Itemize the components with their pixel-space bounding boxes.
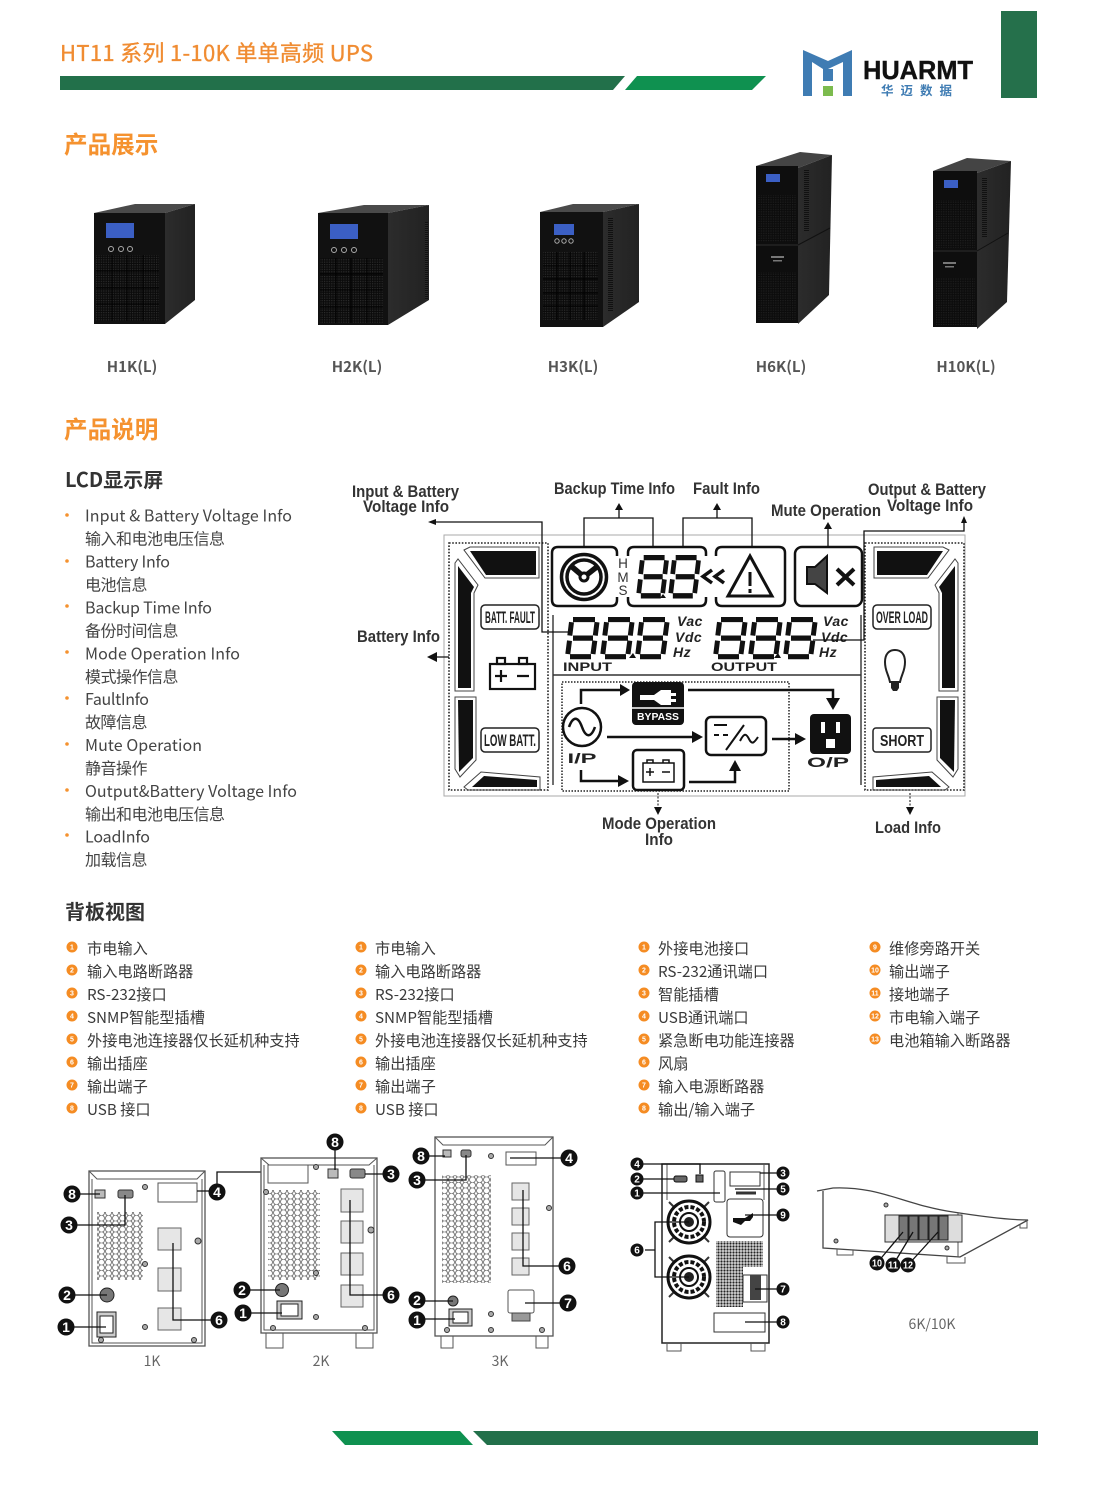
rear list column 4: 10 xyxy=(871,968,879,974)
rear list column 2: 6 xyxy=(359,1060,363,1066)
caption 1K: 1K xyxy=(144,1351,160,1371)
rear list column 4: 维修旁路开关 xyxy=(889,937,980,959)
battery info panel xyxy=(449,543,548,790)
rear list column 2: 7 xyxy=(359,1082,363,1090)
LCD feature list: 电池信息 xyxy=(85,572,148,596)
rear list column 1: 输入电路断路器 xyxy=(87,960,193,982)
output readout xyxy=(711,613,849,674)
rear list column 1 xyxy=(66,937,300,1120)
mode operation panel xyxy=(562,682,851,791)
product labels xyxy=(107,356,996,377)
rear panel 3K: 8 xyxy=(417,1148,425,1164)
logo: HUARMT xyxy=(863,55,973,85)
rear panel 2K: 2 xyxy=(238,1282,246,1298)
LCD feature list: 模式操作信息 xyxy=(85,664,179,688)
product: H6K xyxy=(756,152,832,324)
power flow arrows xyxy=(581,684,840,787)
heading: rear panel view: 背板视图 xyxy=(65,896,145,925)
input source xyxy=(563,708,601,766)
rear list column 1: 7 xyxy=(70,1082,74,1090)
LCD feature list: 加载信息 xyxy=(85,846,148,870)
rear panel 2K xyxy=(234,1134,400,1348)
inverter block xyxy=(706,717,766,755)
rear list column 2: 2 xyxy=(359,968,363,974)
callout: backup time: Backup Time Info xyxy=(554,479,675,498)
rear list column 3: USB通讯端口 xyxy=(658,1006,749,1028)
rear list column 1: 外接电池连接器仅长延机种支持 xyxy=(87,1029,300,1051)
rear list column 1: 3 xyxy=(70,990,74,998)
rear list column 2 xyxy=(356,937,588,1120)
battery block xyxy=(633,750,684,790)
rear panel 6K/10K: 4 xyxy=(634,1160,640,1170)
heading: product description: 产品说明 xyxy=(64,411,158,445)
rear list column 2: 3 xyxy=(359,990,363,998)
rear panel 1K: 6 xyxy=(215,1312,223,1328)
rear list column 4: 12 xyxy=(871,1014,879,1020)
rear list column 1: 2 xyxy=(70,968,74,974)
side view 6K/10K: 10 xyxy=(872,1258,882,1270)
caption 2K: 2K xyxy=(313,1351,329,1371)
LCD feature list: 静音操作 xyxy=(85,755,148,779)
input readout: Vdc xyxy=(675,629,702,645)
LCD feature list: 输出和电池电压信息 xyxy=(85,801,225,825)
rear panel 6K/10K: 5 xyxy=(780,1184,786,1196)
side view 6K/10K xyxy=(817,1188,1028,1272)
rear panel 6K/10K: 1 xyxy=(634,1188,640,1200)
product: H1K xyxy=(94,204,195,324)
rear list column 4: 11 xyxy=(871,990,879,998)
header title: HT11 系列 1-10K 单单高频 UPS xyxy=(60,36,373,68)
rear list column 4: 13 xyxy=(871,1036,879,1044)
bypass block xyxy=(632,682,684,725)
LCD feature list: Input & Battery Voltage Info xyxy=(85,502,292,526)
rear list column 2: USB 接口 xyxy=(375,1098,439,1120)
rear list column 3: RS-232通讯端口 xyxy=(658,960,768,982)
rear list column 3: 风扇 xyxy=(658,1052,688,1074)
rear list column 2: RS-232接口 xyxy=(375,983,455,1005)
callout: mode xyxy=(602,814,716,849)
LCD feature list: 输入和电池电压信息 xyxy=(85,526,225,550)
rear list column 1: 输出端子 xyxy=(87,1075,148,1097)
rear list column 4 xyxy=(870,937,1010,1051)
rear panel 3K: 7 xyxy=(564,1295,572,1311)
rear list column 2: SNMP智能型插槽 xyxy=(375,1006,493,1028)
output socket xyxy=(807,714,851,770)
rear panel 6K/10K: 2 xyxy=(634,1174,640,1186)
product labels: H6K(L) xyxy=(756,356,806,377)
rear panel 1K: 8 xyxy=(68,1186,76,1202)
callout: mode: Info xyxy=(645,830,673,849)
callout: output battery voltage: Voltage Info xyxy=(887,496,973,515)
rear list column 3: 8 xyxy=(642,1106,646,1112)
rear list column 1: SNMP智能型插槽 xyxy=(87,1006,205,1028)
output readout: Vac xyxy=(823,613,849,629)
fault warning box xyxy=(716,547,785,606)
callout: input battery voltage xyxy=(352,482,459,516)
rear panel 1K: 1 xyxy=(62,1319,70,1335)
input readout: INPUT xyxy=(563,660,613,674)
input readout: Vac xyxy=(677,613,703,629)
LCD feature list: FaultInfo xyxy=(85,686,149,710)
product: H3K xyxy=(540,204,639,327)
callout: load: Load Info xyxy=(875,818,941,837)
mute box xyxy=(795,547,862,606)
rear list column 2: 外接电池连接器仅长延机种支持 xyxy=(375,1029,588,1051)
rear panel 6K/10K: 6 xyxy=(634,1246,640,1256)
rear panel 1K: 4 xyxy=(213,1184,221,1200)
caption 3K: 3K xyxy=(492,1351,508,1371)
rear panel 1K: 3 xyxy=(65,1217,73,1233)
rear list column 3: 智能插槽 xyxy=(658,983,719,1005)
rear panel 6K/10K: 3 xyxy=(780,1168,786,1180)
load info panel: SHORT xyxy=(880,733,924,750)
rear list column 3: 1 xyxy=(642,944,646,952)
rear list column 1: 4 xyxy=(70,1014,74,1020)
rear list column 3: 3 xyxy=(642,990,646,998)
battery info panel: LOW BATT. xyxy=(484,731,536,750)
HMS letters: M xyxy=(617,570,629,585)
product labels: H1K(L) xyxy=(107,356,157,377)
rear panel 6K/10K: 7 xyxy=(780,1284,786,1296)
rear list column 1: USB 接口 xyxy=(87,1098,151,1120)
LCD feature list: Mute Operation xyxy=(85,732,202,756)
backup time digits xyxy=(628,547,706,606)
rear list column 2: 8 xyxy=(359,1106,363,1112)
rear list column 2: 市电输入 xyxy=(375,937,436,959)
HMS letters: H xyxy=(618,556,628,571)
callout: mute: Mute Operation xyxy=(771,501,881,520)
callout: fault: Fault Info xyxy=(693,479,760,498)
rear list column 3: 5 xyxy=(642,1036,646,1044)
rear list column 4: 接地端子 xyxy=(889,983,950,1005)
callout: input battery voltage: Voltage Info xyxy=(363,497,449,516)
header stripe xyxy=(60,76,766,90)
footer stripe xyxy=(332,1431,1038,1445)
rear panel 1K xyxy=(58,1171,283,1346)
callout: output battery voltage xyxy=(868,480,986,515)
LCD feature list: 备份时间信息 xyxy=(85,618,179,642)
rear list column 3: 4 xyxy=(642,1014,646,1020)
side view 6K/10K: 12 xyxy=(903,1260,913,1272)
rear list column 1: 1 xyxy=(70,944,74,952)
input source: I/P xyxy=(568,750,596,766)
callout: mode: Mode Operation xyxy=(602,814,716,833)
rear list column 2: 输入电路断路器 xyxy=(375,960,481,982)
LCD feature list xyxy=(65,502,297,870)
product labels: H2K(L) xyxy=(332,356,382,377)
LCD diagram xyxy=(352,479,986,849)
rear list column 1: 输出插座 xyxy=(87,1052,148,1074)
load info panel xyxy=(865,543,964,790)
LCD feature list: Mode Operation Info xyxy=(85,640,240,664)
rear panel 2K: 8 xyxy=(331,1134,339,1150)
battery info panel: BATT. FAULT xyxy=(485,608,535,627)
input readout: Hz xyxy=(673,644,691,660)
rear list column 1: 5 xyxy=(70,1036,74,1044)
rear panel 2K: 3 xyxy=(387,1166,395,1182)
rear list column 3: 外接电池接口 xyxy=(658,937,749,959)
rear list column 4: 输出端子 xyxy=(889,960,950,982)
rear panel 3K: 6 xyxy=(563,1258,571,1274)
rear panel 3K: 1 xyxy=(413,1312,421,1328)
heading: LCD: LCD显示屏 xyxy=(65,464,163,493)
rear list column 1: 6 xyxy=(70,1060,74,1066)
rear list column 1: 市电输入 xyxy=(87,937,148,959)
rear list column 2: 1 xyxy=(359,944,363,952)
rear list column 3: 2 xyxy=(642,968,646,974)
rear list column 3: 6 xyxy=(642,1060,646,1066)
rear panel 3K: 2 xyxy=(413,1292,421,1308)
LCD feature list: Output&Battery Voltage Info xyxy=(85,778,297,802)
rear panel 2K: 1 xyxy=(239,1305,247,1321)
rear panel 3K: 4 xyxy=(565,1150,573,1166)
LCD frame xyxy=(444,535,965,796)
rear list column 3: 输出/输入端子 xyxy=(658,1098,755,1120)
input readout xyxy=(563,613,703,674)
logo: 华迈数据 xyxy=(881,80,959,99)
rear panel 1K: 2 xyxy=(63,1287,71,1303)
caption 6K/10K: 6K/10K xyxy=(909,1314,955,1334)
product: H10K xyxy=(933,158,1011,329)
rear list column 1: RS-232接口 xyxy=(87,983,167,1005)
rear panel 3K: 3 xyxy=(413,1172,421,1188)
rear panel 6K/10K: 9 xyxy=(780,1210,786,1222)
chevrons xyxy=(703,570,724,583)
corner tab xyxy=(1001,11,1037,98)
rear list column 3: 7 xyxy=(642,1082,646,1090)
callout: input battery voltage: Input & Battery xyxy=(352,482,459,501)
callout: battery: Battery Info xyxy=(357,627,440,646)
load info panel: OVER LOAD xyxy=(876,608,928,627)
rear list column 3: 输入电源断路器 xyxy=(658,1075,764,1097)
output socket: O/P xyxy=(807,754,849,770)
LCD feature list: Battery Info xyxy=(85,548,170,572)
rear list column 2: 5 xyxy=(359,1036,363,1044)
rear list column 4: 9 xyxy=(873,944,877,952)
rear list column 2: 4 xyxy=(359,1014,363,1020)
output readout: OUTPUT xyxy=(711,660,778,674)
rear list column 1: 8 xyxy=(70,1106,74,1112)
product labels: H3K(L) xyxy=(548,356,598,377)
callout lines xyxy=(427,503,967,815)
side view 6K/10K: 11 xyxy=(888,1260,898,1272)
output readout: Hz xyxy=(819,644,837,660)
bypass block: BYPASS xyxy=(637,712,679,723)
rear panel 6K/10K xyxy=(630,1158,790,1351)
clock icon box xyxy=(552,547,617,606)
rear list column 4: 市电输入端子 xyxy=(889,1006,980,1028)
rear list column 2: 输出插座 xyxy=(375,1052,436,1074)
callout: output battery voltage: Output & Battery xyxy=(868,480,986,499)
product: H2K xyxy=(318,205,429,325)
rear list column 3 xyxy=(638,937,795,1120)
output readout: Vdc xyxy=(821,629,848,645)
logo xyxy=(803,50,973,99)
product labels: H10K(L) xyxy=(936,356,996,377)
HMS letters xyxy=(617,556,629,598)
heading: product display: 产品展示 xyxy=(64,126,158,160)
rear list column 4: 电池箱输入断路器 xyxy=(889,1029,1010,1051)
rear list column 3: 紧急断电功能连接器 xyxy=(658,1029,795,1051)
rear panel 6K/10K: 8 xyxy=(780,1318,786,1328)
LCD feature list: LoadInfo xyxy=(85,824,150,848)
LCD feature list: 故障信息 xyxy=(85,709,148,733)
rear panel 2K: 6 xyxy=(387,1287,395,1303)
rear list column 2: 输出端子 xyxy=(375,1075,436,1097)
rear panel 3K xyxy=(408,1137,578,1348)
LCD feature list: Backup Time Info xyxy=(85,594,212,618)
HMS letters: S xyxy=(618,583,628,598)
